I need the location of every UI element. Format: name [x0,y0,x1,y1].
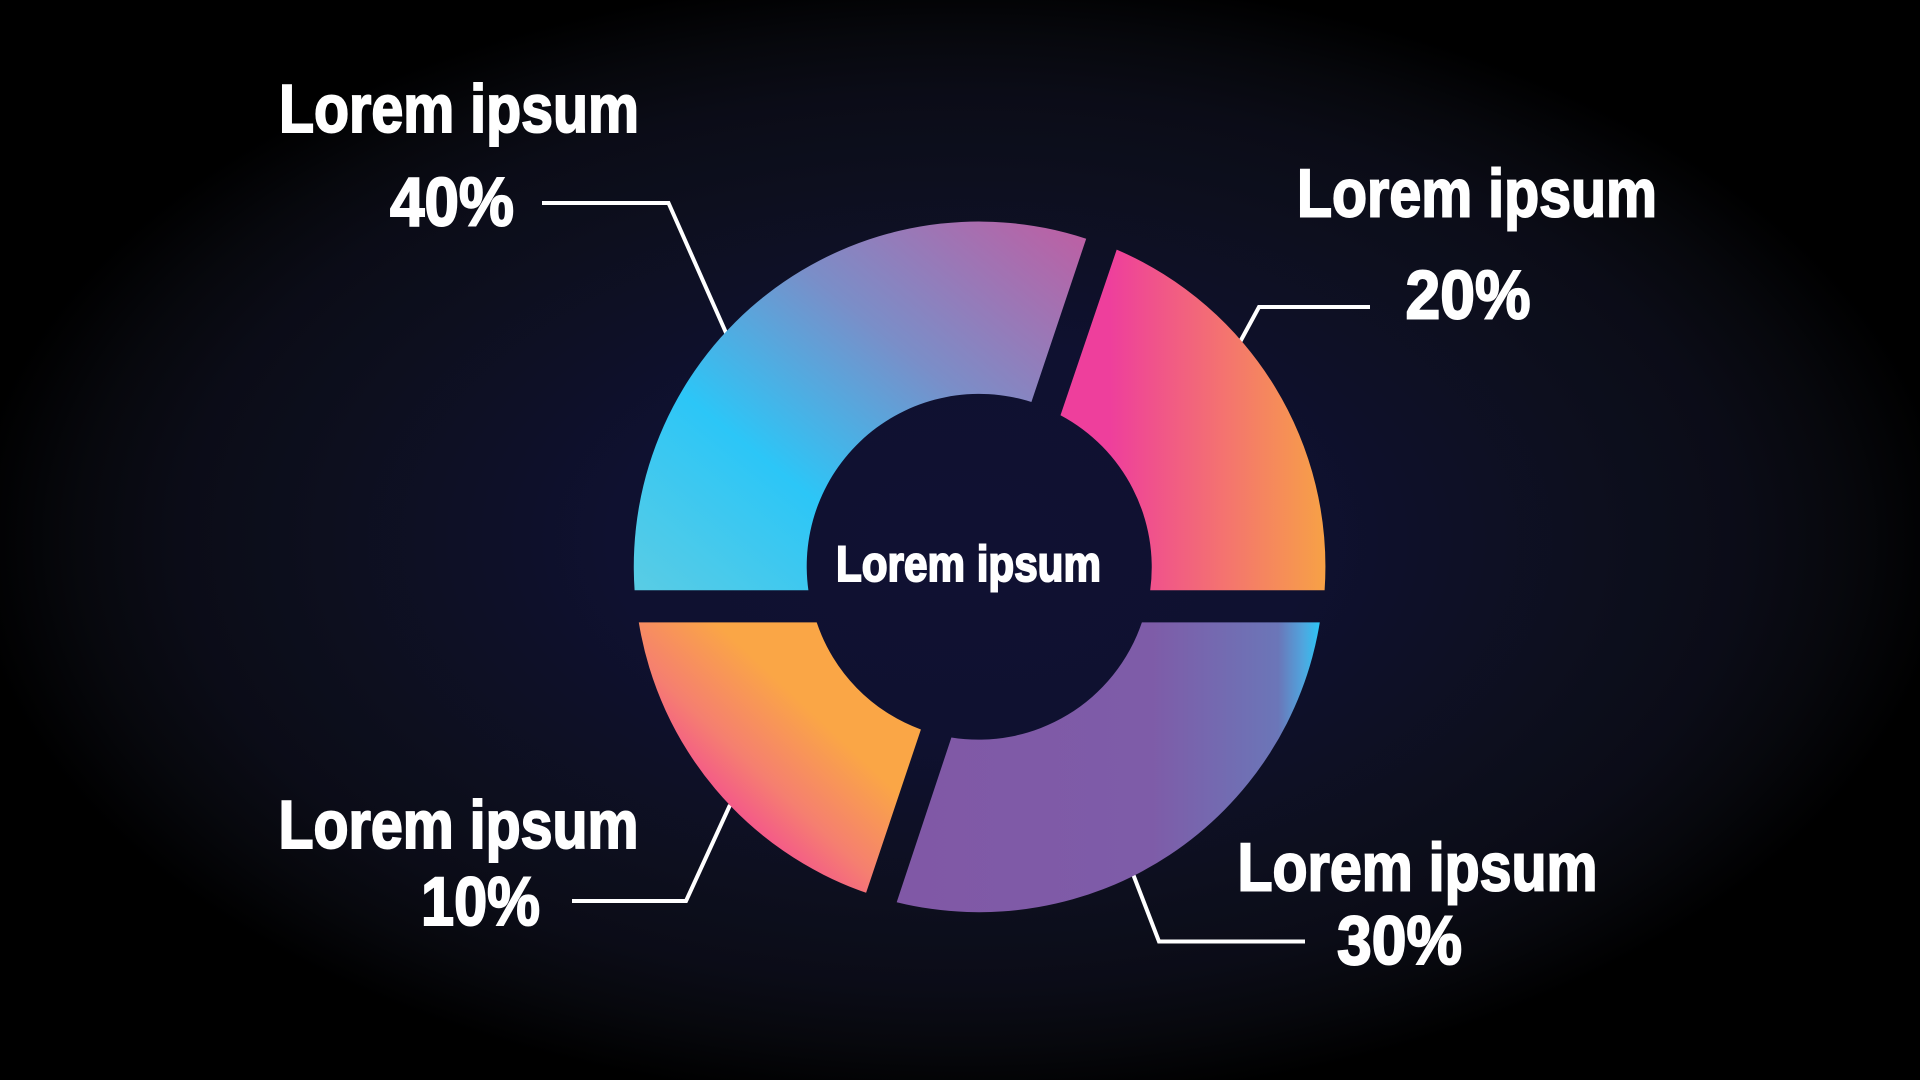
value: 30% [1337,902,1462,979]
leader line: 30% [1133,874,1305,942]
segment: 40% blue to purple [634,222,1086,590]
heading: Lorem ipsum [1238,830,1598,906]
value: 20% [1406,256,1530,334]
heading: Lorem ipsum [1297,156,1657,232]
center label: Lorem ipsum [836,536,1101,592]
leader line: 40% [542,203,727,335]
callout: 20% [1297,156,1657,334]
segment: 30% purple to blue [897,622,1320,912]
value: 10% [421,863,540,940]
donut chart [634,222,1325,912]
heading: Lorem ipsum [279,71,639,147]
segment: 10% orange to pink [639,622,921,893]
value: 40% [390,164,514,240]
callout: 40% [279,71,639,240]
leader line: 10% [572,805,730,901]
callout: 10% [278,787,638,940]
segment: 20% pink to orange [1060,250,1325,590]
callout: 30% [1238,830,1598,979]
leader line: 20% [1240,307,1370,342]
heading: Lorem ipsum [278,787,638,863]
